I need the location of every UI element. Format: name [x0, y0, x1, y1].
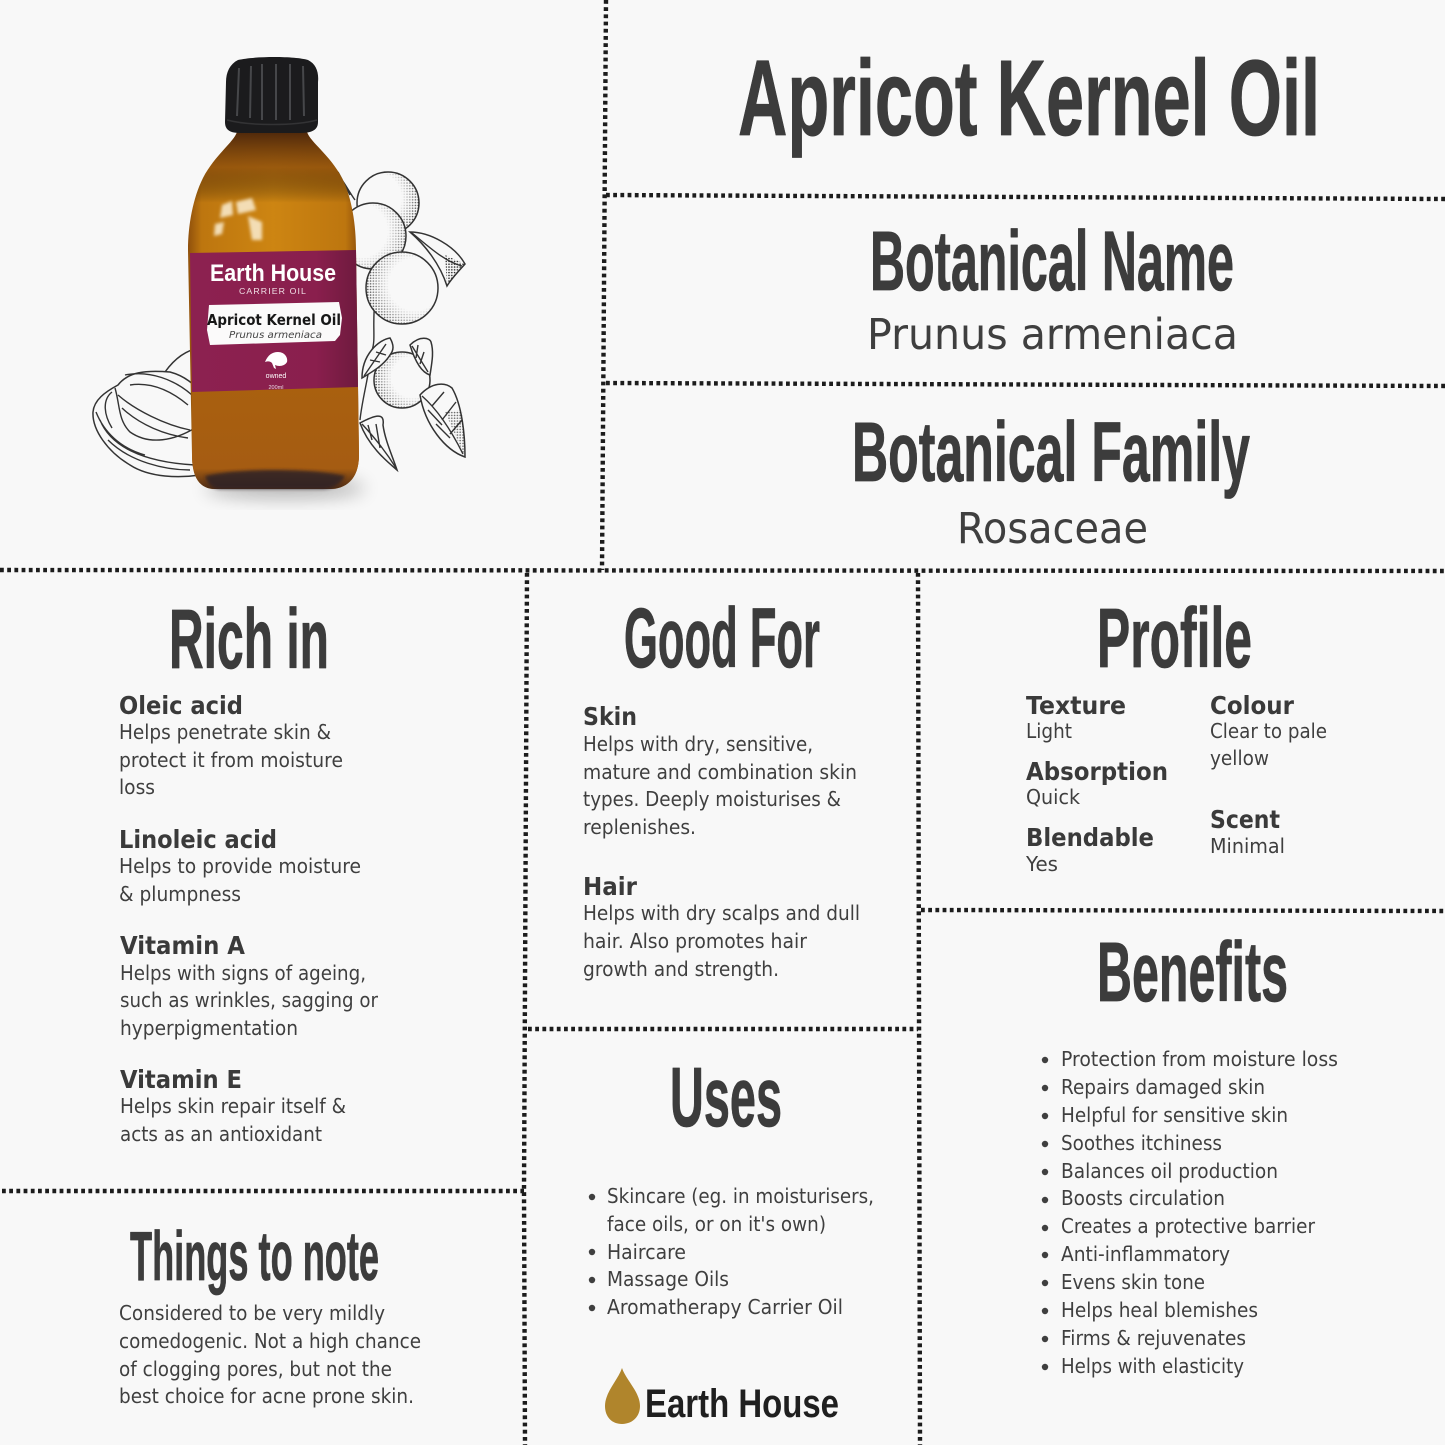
item: vitamin e: Vitamin E [120, 1065, 242, 1094]
list: benefits: Balances oil production [1061, 1159, 1278, 1183]
item: blendable: Blendable [1026, 823, 1154, 852]
list: benefits: Helps with elasticity [1061, 1354, 1244, 1378]
list: benefits: Protection from moisture loss [1061, 1047, 1338, 1071]
panel: benefits [1042, 925, 1338, 1378]
item: linoleic acid: & plumpness [119, 882, 241, 906]
item: linoleic acid: Helps to provide moisture [119, 854, 361, 878]
item: linoleic acid [119, 825, 361, 906]
item: oleic acid [119, 691, 343, 799]
label brand: Earth House [210, 260, 336, 287]
text: note body: of clogging pores, but not the [119, 1357, 392, 1381]
list: benefits: Creates a protective barrier [1061, 1214, 1316, 1238]
item: vitamin a: hyperpigmentation [120, 1016, 298, 1040]
heading: things to note: Things to note [130, 1217, 379, 1295]
item: absorption: Quick [1026, 785, 1080, 809]
list: uses: face oils, or on it's own) [607, 1212, 826, 1236]
item: absorption [1026, 757, 1168, 809]
icon: apricot fruit top [357, 172, 419, 234]
bottle glass [188, 132, 359, 489]
heading: profile: Profile [1097, 591, 1252, 685]
item: oleic acid: loss [119, 775, 155, 799]
item: colour: Clear to pale [1210, 719, 1327, 743]
icon: small leaves [362, 338, 433, 378]
item: oleic acid: Helps penetrate skin & [119, 720, 331, 744]
item: hair: Helps with dry scalps and dull [583, 901, 860, 925]
heading: rich in: Rich in [169, 592, 329, 686]
item: scent: Scent [1210, 805, 1280, 834]
bottle shoulder shading [188, 132, 356, 250]
icon: apricot leaf lower right [420, 384, 465, 457]
list: benefits: Soothes itchiness [1061, 1131, 1222, 1155]
item: hair: growth and strength. [583, 957, 779, 981]
list: uses [589, 1184, 874, 1319]
bottle base [205, 470, 345, 489]
list: uses: Haircare [607, 1240, 686, 1264]
item: oleic acid: Oleic acid [119, 691, 243, 720]
item: vitamin a: Helps with signs of ageing, [120, 961, 366, 985]
icon: apricot fruit lower [374, 352, 430, 408]
item: linoleic acid: Linoleic acid [119, 825, 277, 854]
item: vitamin e: Helps skin repair itself & [120, 1094, 346, 1118]
value: botanical name: Prunus armeniaca [867, 310, 1238, 360]
heading: good for: Good For [624, 591, 820, 685]
item: vitamin a: such as wrinkles, sagging or [120, 988, 378, 1012]
item: vitamin a [120, 931, 378, 1040]
item: blendable [1025, 823, 1154, 876]
item: hair: hair. Also promotes hair [583, 929, 808, 953]
item: vitamin a: Vitamin A [120, 931, 245, 960]
list: benefits: Repairs damaged skin [1061, 1075, 1265, 1099]
illustration: amber bottle [188, 57, 359, 489]
text: note body: best choice for acne prone skin. [119, 1384, 414, 1408]
illustration: apricot branch [333, 168, 465, 470]
item: skin [583, 702, 857, 839]
item: skin: types. Deeply moisturises & [583, 787, 841, 811]
item: texture: Light [1026, 719, 1072, 743]
item: vitamin e [120, 1065, 346, 1146]
heading: uses: Uses [670, 1050, 782, 1144]
item: skin: Skin [583, 702, 637, 731]
section: botanical family [852, 405, 1250, 554]
item: colour: Colour [1210, 691, 1295, 720]
list: benefits: Boosts circulation [1061, 1186, 1225, 1210]
bottle shadow [205, 478, 365, 498]
logo: earth house [605, 1368, 839, 1426]
label owned: owned [266, 373, 286, 380]
text: note body: comedogenic. Not a high chance [119, 1329, 421, 1353]
logo text: Earth House [645, 1382, 839, 1426]
item: texture [1026, 691, 1126, 743]
item: colour [1210, 691, 1327, 770]
panel: rich in [119, 592, 378, 1146]
label volume: 200ml [269, 385, 283, 391]
icon: kiwi [265, 352, 287, 369]
panel: things to note [119, 1217, 421, 1408]
icon: apricot fruit large [366, 252, 438, 324]
list: benefits: Anti-inflammatory [1061, 1242, 1230, 1266]
item: skin: replenishes. [583, 815, 696, 839]
list: benefits: Evens skin tone [1061, 1270, 1205, 1294]
panel: uses [589, 1050, 874, 1319]
item: scent: Minimal [1210, 834, 1285, 858]
list: benefits [1042, 1047, 1338, 1378]
text: note body [119, 1301, 421, 1408]
item: texture: Texture [1026, 691, 1126, 720]
list: benefits: Helps heal blemishes [1061, 1298, 1258, 1322]
item: absorption: Absorption [1026, 757, 1168, 786]
item: skin: Helps with dry, sensitive, [583, 732, 813, 756]
icon: apricot fruit middle [352, 202, 407, 270]
panel: profile [1025, 591, 1327, 876]
label subtitle: CARRIER OIL [239, 287, 307, 296]
item: hair: Hair [583, 872, 638, 901]
label botanical: Prunus armeniaca [229, 330, 322, 341]
list: uses: Aromatherapy Carrier Oil [607, 1295, 843, 1319]
item: vitamin e: acts as an antioxidant [120, 1122, 322, 1146]
item: skin: mature and combination skin [583, 760, 857, 784]
item: colour: yellow [1210, 746, 1269, 770]
heading: benefits: Benefits [1097, 925, 1288, 1019]
glass reflection [214, 198, 262, 240]
bottle cap [225, 57, 318, 133]
list: benefits: Firms & rejuvenates [1061, 1326, 1246, 1350]
bottle lower glass [192, 386, 359, 489]
icon: apricot leaf upper [410, 232, 465, 286]
label white strip [207, 302, 342, 345]
item: blendable: Yes [1025, 852, 1058, 876]
panel: good for [583, 591, 860, 981]
item: hair [583, 872, 860, 981]
illustration: apricot kernel [93, 348, 200, 477]
item: scent [1210, 805, 1285, 858]
list: uses: Massage Oils [607, 1267, 729, 1291]
item: oleic acid: protect it from moisture [119, 748, 343, 772]
icon: apricot leaf bottom [360, 416, 397, 470]
value: botanical family: Rosaceae [957, 504, 1148, 554]
section: botanical name [867, 214, 1238, 360]
list: benefits: Helpful for sensitive skin [1061, 1103, 1288, 1127]
label product name: Apricot Kernel Oil [207, 311, 341, 329]
list: uses: Skincare (eg. in moisturisers, [607, 1184, 874, 1208]
bottle label [190, 250, 358, 392]
text: note body: Considered to be very mildly [119, 1301, 385, 1325]
icon: gold drop [605, 1368, 640, 1424]
